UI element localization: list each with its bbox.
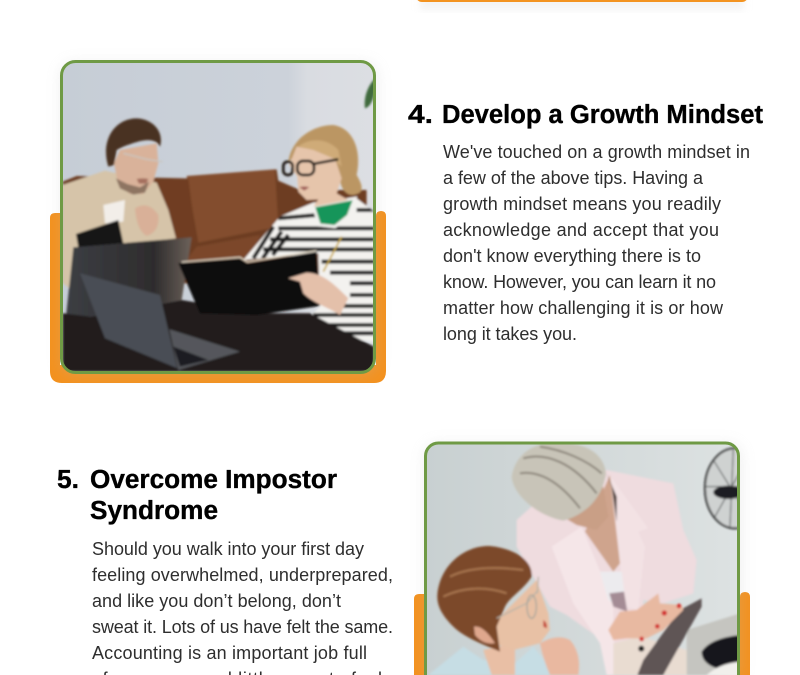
woman's collar <box>313 198 355 227</box>
text block: growth mindset: know. However, you can learn it no <box>443 272 716 292</box>
table <box>63 300 374 372</box>
pink blazer <box>517 470 697 675</box>
text block: growth mindset: growth mindset means you readily <box>443 194 721 214</box>
man's notebook <box>76 220 123 247</box>
text block: impostor syndrome: sweat it. Lots of us have felt the same. <box>92 617 393 637</box>
heading: Develop a Growth Mindset: 4. <box>408 101 433 129</box>
text block: impostor syndrome: and like you don’t belong, don’t <box>92 591 341 611</box>
text block: growth mindset: acknowledge and accept that you <box>443 220 719 240</box>
heading: Overcome Impostor Syndrome: 5. <box>57 466 79 494</box>
standing woman's hair and face <box>512 443 608 530</box>
text block: growth mindset: a few of the above tips. Having a <box>443 168 704 188</box>
plant leaf <box>365 78 375 108</box>
text block: growth mindset: don't know everything there is to <box>443 246 701 266</box>
sofa <box>63 169 367 283</box>
panel: photo card, two women with a tablet <box>414 441 765 675</box>
wall fan <box>702 446 737 531</box>
man <box>63 118 176 290</box>
orange backing <box>50 211 386 383</box>
text block: growth mindset: matter how challenging it is or how <box>443 298 724 318</box>
text block: impostor syndrome: Accounting is an important job full <box>92 643 367 663</box>
woman's open book and hand <box>178 237 348 315</box>
panel: photo card, two people with notebooks <box>50 60 386 383</box>
seated woman <box>428 546 579 675</box>
woman's shirt <box>240 197 377 343</box>
photo <box>60 60 377 375</box>
text block: impostor syndrome: feeling overwhelmed, underprepared, <box>92 565 393 585</box>
orange side tabs <box>414 592 750 675</box>
text block: impostor syndrome <box>92 539 393 675</box>
text block: growth mindset: We've touched on a growth mindset in <box>443 142 750 162</box>
pointing hand and tablet <box>608 593 702 675</box>
text block: growth mindset: long it takes you. <box>443 324 577 344</box>
heading: Develop a Growth Mindset: Develop a Growth Mindset <box>442 101 763 129</box>
photo frame <box>426 443 738 675</box>
text block: growth mindset <box>443 142 750 344</box>
front laptop <box>80 273 240 370</box>
text block: impostor syndrome: Should you walk into your first day <box>92 539 364 559</box>
back laptop <box>66 237 192 317</box>
top card orange edge <box>416 0 748 10</box>
heading: Overcome Impostor Syndrome: Syndrome <box>90 497 218 525</box>
woman's head <box>283 125 362 207</box>
floor and chair <box>687 613 740 675</box>
heading: Overcome Impostor Syndrome <box>57 466 337 525</box>
heading: Overcome Impostor Syndrome: Overcome Impostor <box>90 466 337 494</box>
photo <box>427 444 737 675</box>
photo frame <box>62 62 374 372</box>
